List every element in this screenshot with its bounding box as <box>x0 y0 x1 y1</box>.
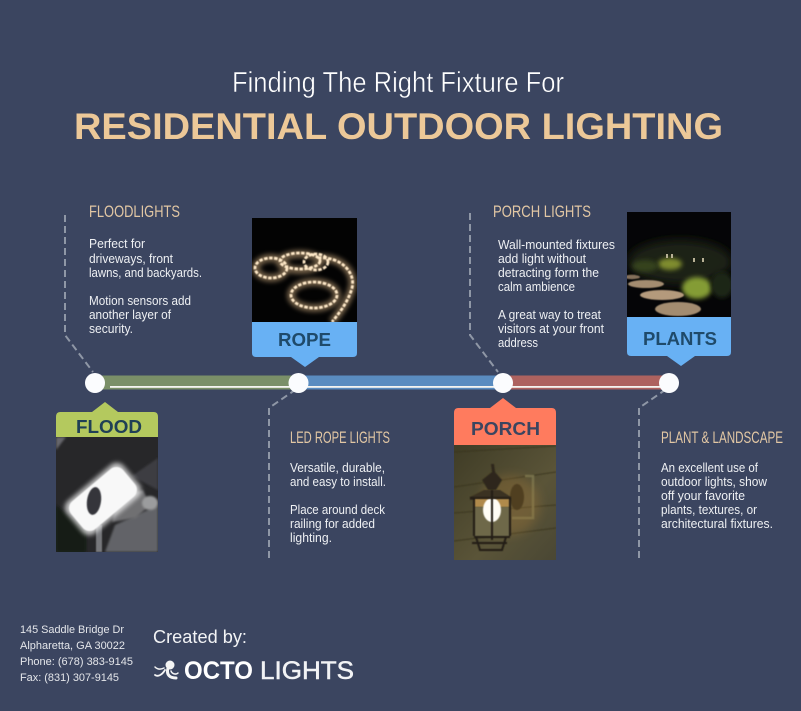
dashed connector: rope <box>269 390 295 558</box>
card: rope <box>252 218 357 367</box>
dashed connector: floodlights <box>65 215 93 372</box>
body text: address <box>498 335 538 350</box>
body text: railing for added <box>290 516 375 531</box>
tag: flood <box>56 402 158 437</box>
card: flood <box>56 402 158 552</box>
body text: off your favorite <box>661 488 745 503</box>
body text: Perfect for <box>89 236 146 251</box>
body text: driveways, front <box>89 251 173 266</box>
panel: floodlights text <box>89 203 202 336</box>
photo: rope light <box>252 218 357 322</box>
tag label: porch: PORCH <box>471 419 540 439</box>
body text: architectural fixtures. <box>661 516 773 531</box>
body text <box>89 236 202 336</box>
address block: Alpharetta, GA 30022 <box>20 640 125 652</box>
body text: Versatile, durable, <box>290 460 385 475</box>
tag label: plants: PLANTS <box>643 329 717 349</box>
tag: porch <box>454 398 556 445</box>
body text <box>498 237 615 350</box>
created by label: Created by: <box>153 627 247 647</box>
body text: detracting form the <box>498 265 599 280</box>
panel: plant and landscape text <box>661 429 783 531</box>
title line 1: Finding The Right Fixture For <box>232 67 564 99</box>
wordmark: LIGHTS: LIGHTS <box>260 657 354 685</box>
heading: FLOODLIGHTS <box>89 203 180 221</box>
tag: plants <box>627 317 731 366</box>
tag: rope <box>252 322 357 367</box>
photo: floodlight <box>56 437 158 552</box>
body text: Motion sensors add <box>89 293 191 308</box>
wordmark: OCTO: OCTO <box>184 657 253 685</box>
dashed connector: plants <box>639 390 665 558</box>
dashed connector: porch <box>470 213 498 372</box>
node 3 <box>493 373 513 393</box>
body text: An excellent use of <box>661 460 758 475</box>
body text: visitors at your front <box>498 321 604 336</box>
timeline segment: red <box>503 376 669 390</box>
photo: porch lantern <box>454 445 556 560</box>
address block: Phone: (678) 383-9145 <box>20 656 133 668</box>
panel: porch lights text <box>493 203 615 350</box>
address block: 145 Saddle Bridge Dr <box>20 624 124 636</box>
body text: lawns, and backyards. <box>89 265 202 280</box>
body text: add light without <box>498 251 586 266</box>
title <box>74 67 723 147</box>
address block <box>20 624 133 684</box>
timeline segment: blue <box>298 376 503 390</box>
body text: calm ambience <box>498 279 575 294</box>
tag label: rope: ROPE <box>278 330 331 350</box>
body text: plants, textures, or <box>661 502 758 517</box>
timeline <box>85 373 679 393</box>
node 2 <box>288 373 308 393</box>
title line 2: RESIDENTIAL OUTDOOR LIGHTING <box>74 106 723 147</box>
body text: outdoor lights, show <box>661 474 768 489</box>
body text: security. <box>89 321 133 336</box>
node 1 <box>85 373 105 393</box>
node 4 <box>659 373 679 393</box>
card: porch <box>454 398 556 560</box>
card: plants <box>624 212 733 366</box>
heading: LED ROPE LIGHTS <box>290 429 390 447</box>
body text <box>661 460 773 531</box>
photo: landscape path <box>624 212 733 317</box>
body text: Place around deck <box>290 502 385 517</box>
body text: another layer of <box>89 307 171 322</box>
timeline highlight line <box>110 386 662 388</box>
timeline segment: green <box>100 376 298 390</box>
tag label: flood: FLOOD <box>76 417 142 437</box>
logo: octo lights <box>155 657 354 685</box>
body text: Wall-mounted fixtures <box>498 237 615 252</box>
body text: and easy to install. <box>290 474 386 489</box>
body text: lighting. <box>290 530 332 545</box>
heading: PORCH LIGHTS <box>493 203 591 221</box>
address block: Fax: (831) 307-9145 <box>20 672 119 684</box>
body text <box>290 460 386 545</box>
panel: LED rope text <box>290 429 390 545</box>
body text: A great way to treat <box>498 307 601 322</box>
icon: octopus <box>155 660 178 678</box>
